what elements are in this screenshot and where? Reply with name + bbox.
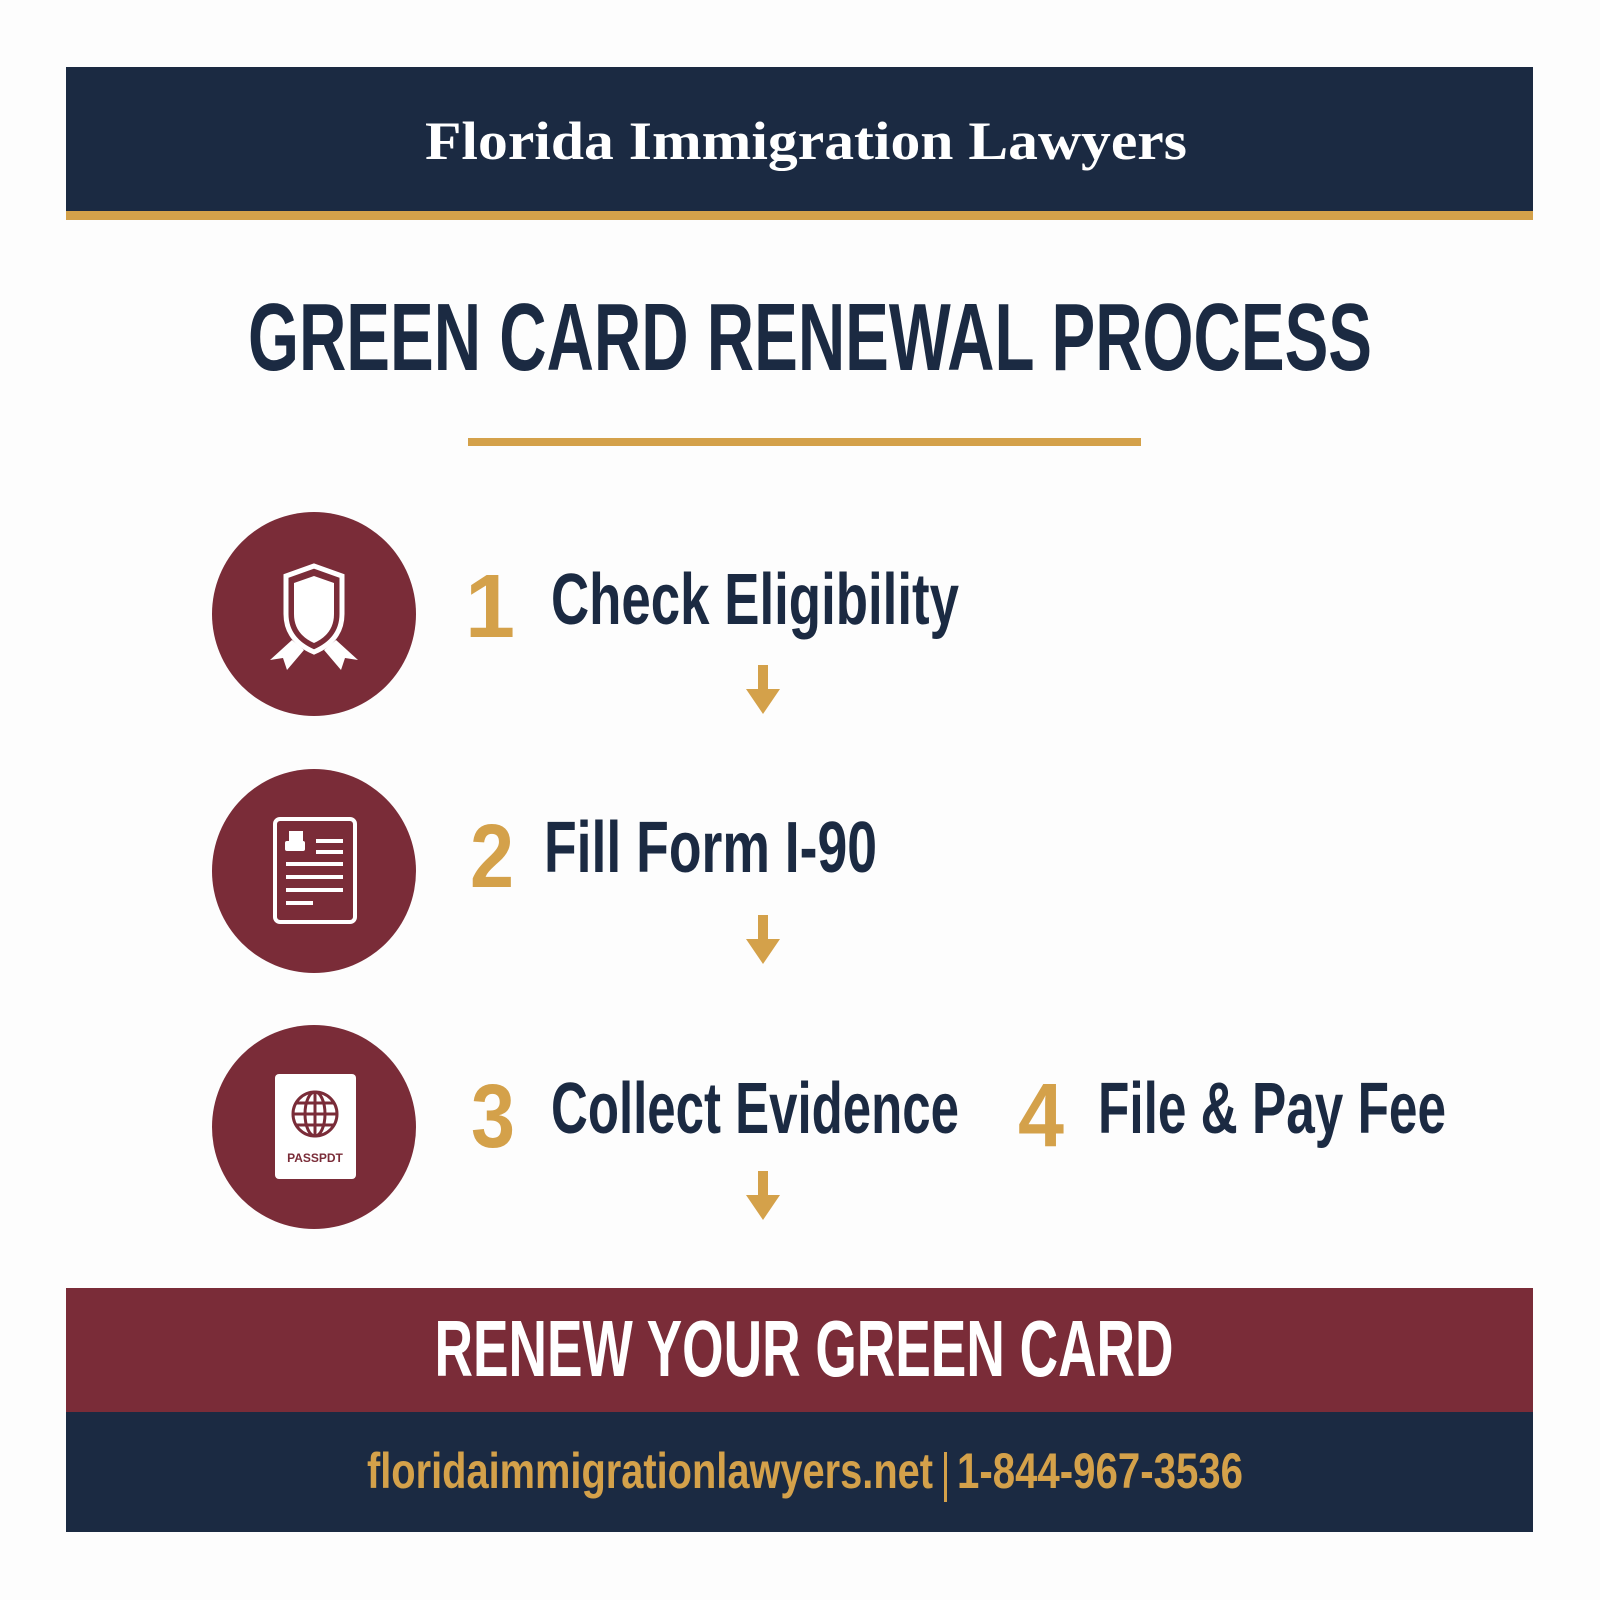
icon: passport: PASSPDT <box>287 1151 344 1165</box>
arrow 3 <box>746 1171 780 1220</box>
step 1 <box>212 512 959 716</box>
step 4 <box>1018 1066 1446 1166</box>
footer contact bar: 1-844-967-3536 <box>957 1443 1243 1499</box>
call to action banner <box>66 1288 1533 1412</box>
step label 4: File & Pay Fee <box>1098 1069 1446 1149</box>
step number 1: 1 <box>465 557 515 657</box>
step number 2: 2 <box>470 807 514 907</box>
step 2 <box>212 769 877 973</box>
arrow 1 <box>746 665 780 714</box>
header banner <box>66 67 1533 220</box>
arrow 2 <box>746 915 780 964</box>
footer contact bar: floridaimmigrationlawyers.net <box>367 1443 933 1499</box>
step label 2: Fill Form I-90 <box>544 808 877 888</box>
step number 3: 3 <box>471 1067 515 1167</box>
header title: Florida Immigration Lawyers <box>425 111 1187 171</box>
icon: passport <box>212 1025 416 1229</box>
icon: form document <box>212 769 416 973</box>
step 3 <box>212 1025 959 1229</box>
icon: shield badge <box>212 512 416 716</box>
heading underline <box>468 438 1141 446</box>
call to action banner: RENEW YOUR GREEN CARD <box>434 1304 1174 1393</box>
footer contact bar <box>66 1412 1533 1532</box>
step label 1: Check Eligibility <box>551 560 959 640</box>
step label 3: Collect Evidence <box>551 1069 959 1149</box>
step number 4: 4 <box>1018 1066 1064 1166</box>
